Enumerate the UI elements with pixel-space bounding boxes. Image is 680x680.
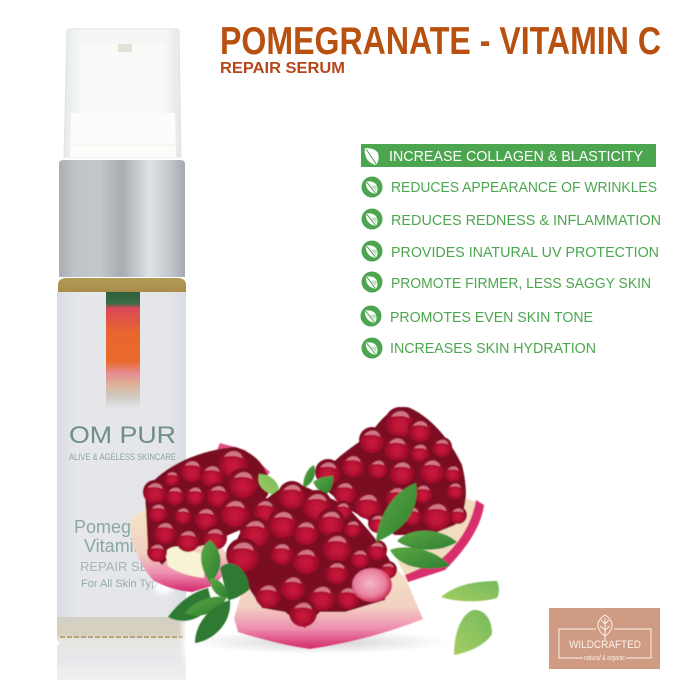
badge leaf icon: [598, 615, 612, 640]
product type: REPAIR SERUM: [80, 559, 178, 574]
bottle label: [57, 292, 186, 617]
cream pith: [165, 547, 205, 578]
wildcrafted badge: [549, 608, 660, 669]
benefit: hydration: [362, 338, 596, 358]
benefits list: [360, 144, 661, 358]
benefit: even tone: PROMOTES EVEN SKIN TONE: [390, 310, 593, 326]
left pomegranate wedge: [130, 443, 270, 592]
pomegranate illustration: [130, 407, 499, 655]
fruit shadow: [190, 630, 450, 654]
top leaves: [258, 465, 333, 497]
right pomegranate wedge: [315, 407, 484, 582]
product name line 2: Vitamin C: [84, 536, 162, 556]
highlighted benefit: [361, 144, 656, 167]
left leaf cluster: [168, 540, 249, 643]
benefit: redness: REDUCES REDNESS & INFLAMMATION: [391, 213, 661, 229]
right leaf cluster: [376, 483, 457, 569]
product name line 1: Pomegranate: [74, 517, 182, 537]
white matte around fruit on bottle: [152, 570, 230, 680]
benefit: firmer skin: PROMOTE FIRMER, LESS SAGGY SKIN: [391, 276, 651, 292]
benefit: UV protection: [362, 240, 659, 262]
badge tagline: natural & organic: [584, 655, 625, 662]
loose leaf lower: [454, 610, 492, 655]
benefit: hydration: INCREASES SKIN HYDRATION: [390, 341, 596, 357]
pale aril: [352, 568, 392, 602]
product bottle: [57, 29, 186, 680]
benefit: redness: [362, 208, 661, 230]
glass base: [57, 617, 186, 655]
benefit: UV protection: PROVIDES INATURAL UV PROTECTION: [391, 245, 659, 261]
brand name: OM PUR: [69, 422, 176, 449]
benefit: wrinkles: REDUCES APPEARANCE OF WRINKLES: [391, 180, 657, 196]
skin type note: For All Skin Types: [81, 578, 169, 590]
badge frame: [559, 629, 651, 658]
loose leaf upper: [441, 581, 499, 601]
benefit: wrinkles: [362, 176, 657, 198]
brand tagline: ALIVE & AGELESS SKINCARE: [69, 452, 176, 462]
silver collar: [59, 160, 185, 277]
subtitle: REPAIR SERUM: [220, 60, 345, 77]
benefit: firmer skin: [362, 272, 651, 292]
base reflection: [57, 655, 186, 680]
clear pump cap: [64, 29, 181, 157]
front pomegranate wedge: [226, 481, 423, 649]
amber residue line: [60, 636, 183, 638]
highlighted benefit: INCREASE COLLAGEN & BLASTICITY: [389, 149, 643, 165]
label photo strip: [106, 292, 140, 408]
amber serum: [58, 278, 186, 292]
benefit: even tone: [360, 306, 593, 326]
badge name: WILDCRAFTED: [569, 639, 641, 651]
